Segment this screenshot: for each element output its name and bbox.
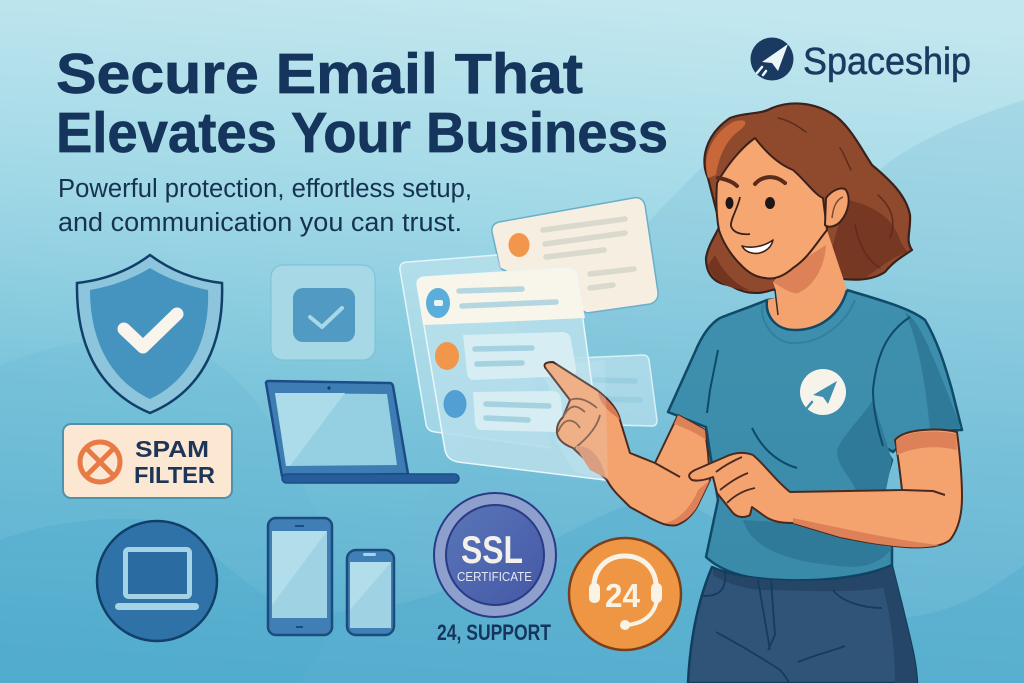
jeans side panel [878, 566, 917, 683]
title [56, 42, 668, 165]
message row 2 [444, 390, 563, 432]
icon: laptop [266, 381, 459, 483]
spam label: SPAM [135, 436, 209, 462]
panel: back glass sheet [400, 255, 552, 448]
panel: cream message card [492, 198, 658, 313]
shirt shadows and seams [707, 300, 961, 567]
badge: SSL certificate: CERTIFICATE [457, 570, 532, 584]
hair shading [706, 118, 908, 290]
collar line [767, 290, 847, 330]
logo: Spaceship: Spaceship [803, 41, 971, 83]
subtitle [58, 175, 472, 237]
jeans [688, 566, 917, 683]
jeans seams [703, 570, 882, 683]
icon: 24 headset [569, 538, 681, 650]
hair back [704, 103, 912, 293]
eyebrows [718, 177, 785, 186]
window header [417, 268, 585, 325]
message row 1 [435, 332, 576, 380]
smile [742, 240, 773, 253]
logo: Spaceship [750, 38, 971, 83]
title: Secure Email That [56, 42, 583, 106]
icon: blocked circle [80, 442, 120, 482]
arm: pointing arm [545, 362, 710, 526]
nose [731, 197, 750, 234]
ear [825, 188, 849, 227]
face [716, 138, 827, 278]
icon: laptop circle [97, 521, 217, 641]
shirt logo [800, 369, 846, 415]
icon: checkbox tile [271, 265, 375, 360]
panel: right glass card [533, 355, 657, 426]
arm shading [558, 392, 710, 524]
icon: 24 headset: 24 [605, 577, 641, 614]
neck [767, 230, 847, 330]
subtitle: and communication you can trust. [58, 209, 462, 237]
support label: 24, SUPPORT [437, 620, 551, 645]
arm: forearm and hand across the body [689, 430, 962, 547]
icon: tablet and phone [268, 518, 394, 635]
eyes [726, 197, 775, 209]
neck shadow [773, 245, 826, 293]
glass overlay over hand [545, 360, 608, 480]
shirt [668, 290, 962, 580]
subtitle: Powerful protection, effortless setup, [58, 175, 472, 203]
icon: shield with check [77, 255, 222, 413]
title: Elevates Your Business [56, 101, 668, 165]
badge: SSL certificate: SSL [461, 529, 523, 572]
panel: front message window [417, 268, 605, 480]
spam label: FILTER [134, 462, 215, 488]
jeans waist shadow [713, 566, 897, 591]
badge: SSL certificate [434, 493, 556, 617]
spam label [134, 436, 215, 488]
badge: spam filter [63, 424, 232, 498]
character: woman in teal shirt [545, 103, 962, 683]
